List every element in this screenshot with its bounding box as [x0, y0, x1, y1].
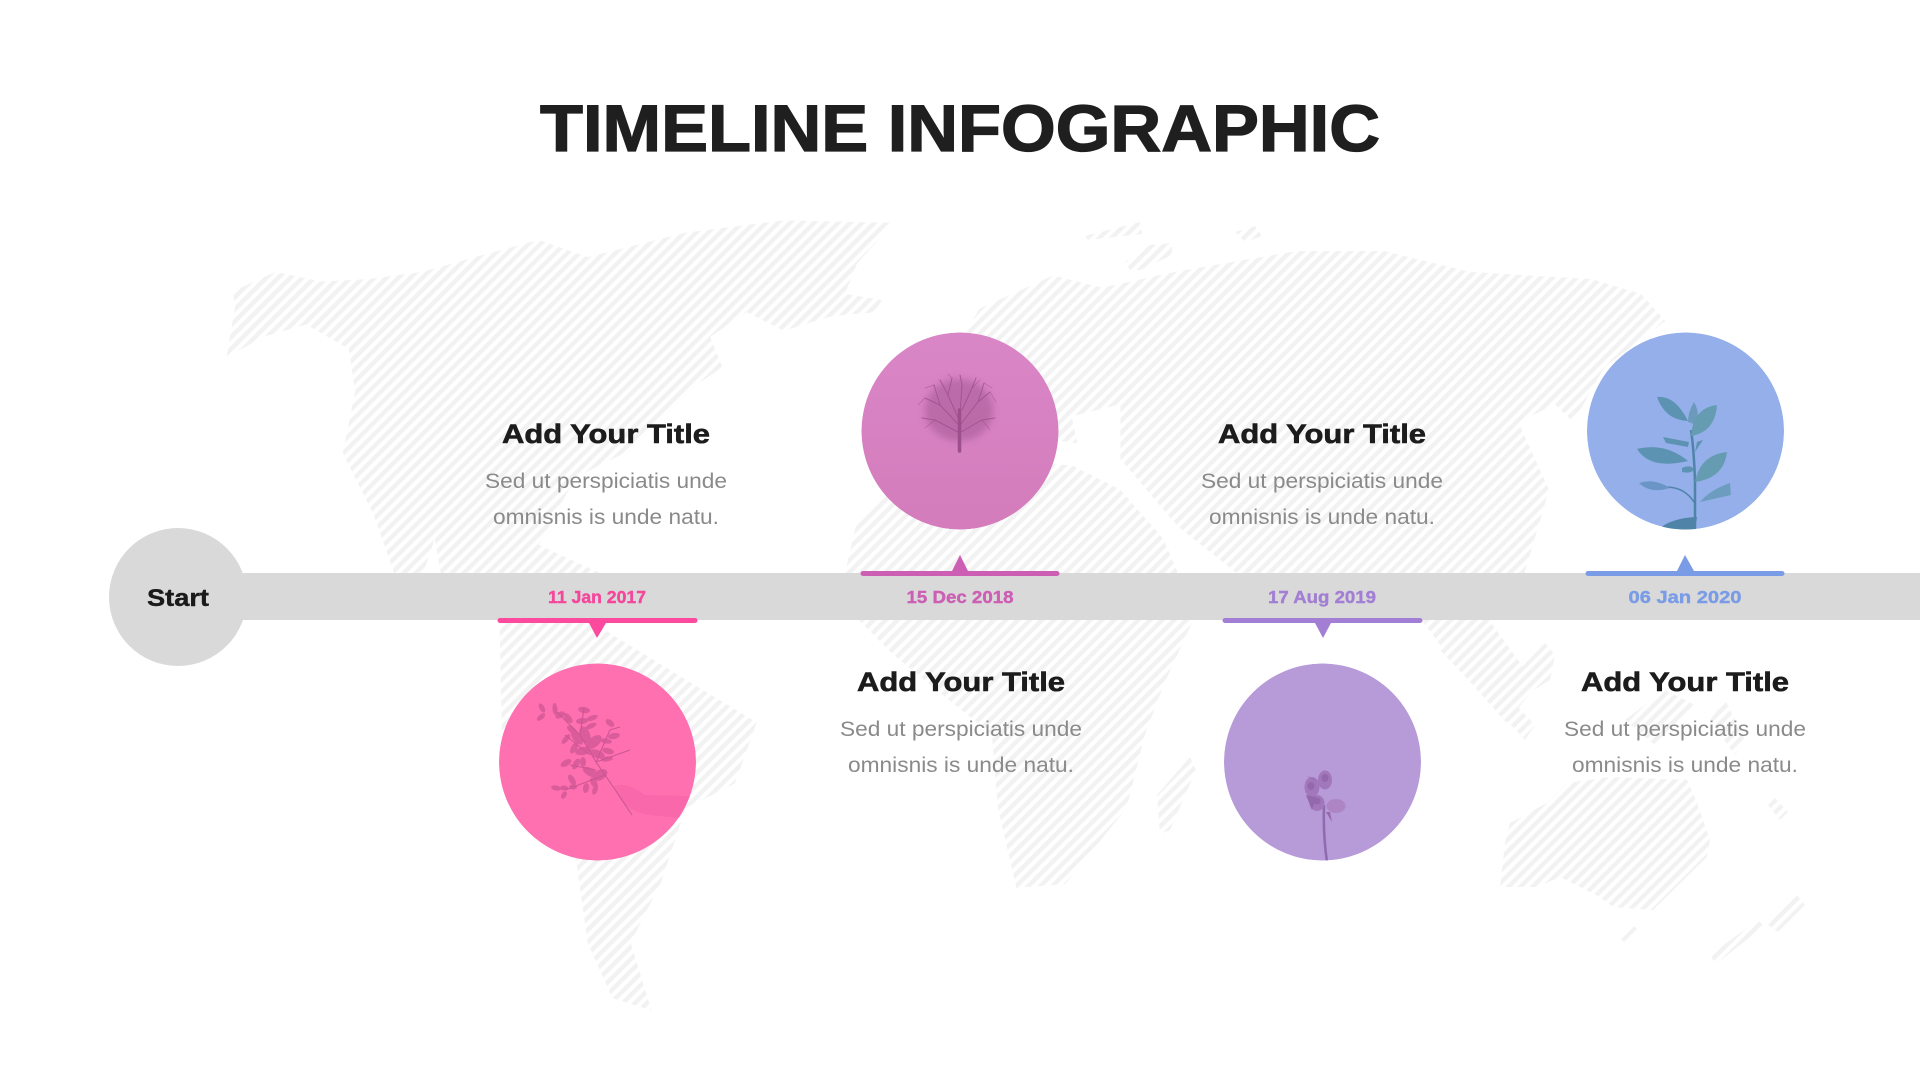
text block 4: omnisnis is unde natu. — [1572, 754, 1798, 777]
start marker — [109, 528, 247, 666]
date label 3: 17 Aug 2019 — [1268, 587, 1376, 607]
marker 3 — [1222, 618, 1422, 638]
marker 1 — [498, 618, 698, 638]
start marker: Start — [147, 585, 209, 612]
marker 2 — [860, 555, 1060, 576]
date label 1: 11 Jan 2017 — [548, 587, 646, 607]
date label 2: 15 Dec 2018 — [906, 587, 1014, 607]
text block 3: omnisnis is unde natu. — [1209, 506, 1435, 529]
milestone 3: 17 Aug 2019 — [1201, 419, 1443, 862]
milestone 4: 06 Jan 2020 — [1564, 332, 1806, 777]
milestone 1: 11 Jan 2017 — [485, 419, 727, 860]
photo circle 2: bare tree — [862, 332, 1058, 530]
photo circle 3: roses — [1224, 664, 1421, 862]
timeline bar — [190, 573, 1920, 620]
title: TIMELINE INFOGRAPHIC — [540, 91, 1380, 165]
marker 4 — [1586, 555, 1784, 576]
text block 3 — [1201, 419, 1443, 529]
text block 3: Add Your Title — [1218, 419, 1426, 449]
text block 2: omnisnis is unde natu. — [848, 754, 1074, 777]
background world map — [200, 200, 1840, 1030]
text block 1 — [485, 419, 727, 529]
date label 4: 06 Jan 2020 — [1628, 587, 1742, 607]
photo circle 4: rubber plant — [1587, 332, 1784, 530]
milestone 2: 15 Dec 2018 — [840, 332, 1082, 777]
text block 4: Add Your Title — [1581, 667, 1789, 697]
text block 1: Sed ut perspiciatis unde — [485, 470, 727, 493]
text block 4: Sed ut perspiciatis unde — [1564, 718, 1806, 741]
text block 1: omnisnis is unde natu. — [493, 506, 719, 529]
text block 1: Add Your Title — [502, 419, 710, 449]
text block 2: Add Your Title — [857, 667, 1065, 697]
text block 2: Sed ut perspiciatis unde — [840, 718, 1082, 741]
text block 4 — [1564, 667, 1806, 777]
photo circle 1: hand holding sprig — [499, 664, 696, 860]
text block 2 — [840, 667, 1082, 777]
text block 3: Sed ut perspiciatis unde — [1201, 470, 1443, 493]
